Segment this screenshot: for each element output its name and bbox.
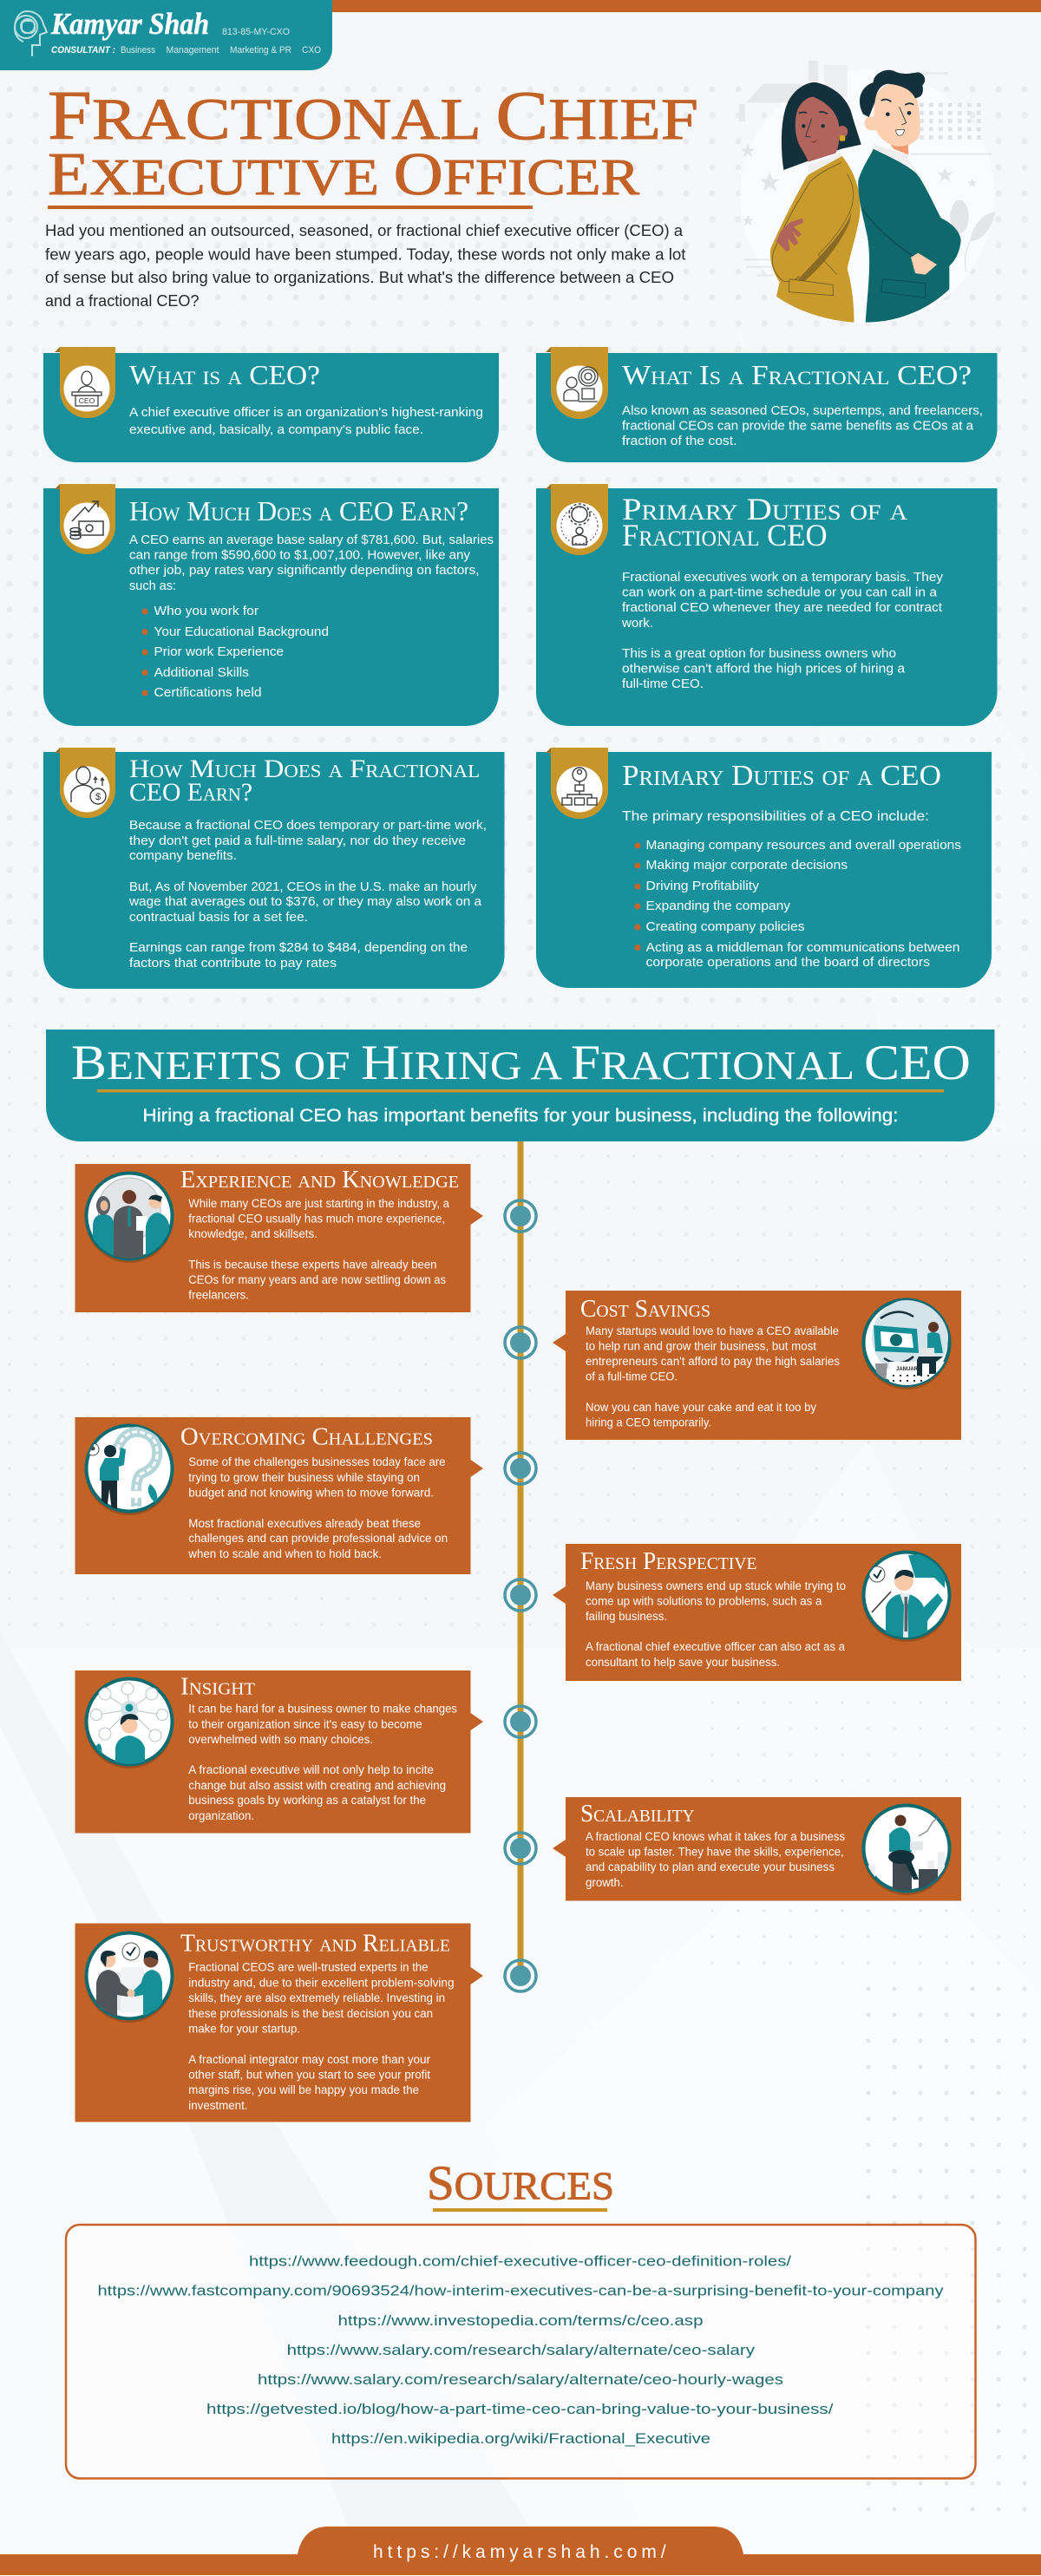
bullet list: Acting as a middleman for communications between <box>645 941 959 955</box>
heading: Cost Savings <box>580 1296 710 1323</box>
body text <box>188 1961 455 2112</box>
body text: contractual basis for a set fee. <box>129 911 308 925</box>
intro paragraph: and a fractional CEO? <box>45 292 200 310</box>
title: EXECUTIVE OFFICER <box>48 141 640 208</box>
tagline: CONSULTANT : <box>51 45 115 56</box>
body text: these professionals is the best decision you can <box>188 2007 433 2020</box>
body text: A fractional integrator may cost more than your <box>188 2053 430 2066</box>
header logo panel <box>0 0 1041 70</box>
timeline spine and nodes <box>505 1141 536 1991</box>
body text: fractional CEO whenever they are needed for contract <box>622 601 942 615</box>
body text <box>586 1579 846 1669</box>
body text: change but also assist with creating and achieving <box>188 1779 446 1792</box>
illustration: two executives back to back <box>739 61 995 324</box>
card: scalability <box>553 1797 961 1901</box>
body text <box>129 406 483 437</box>
body text: when to scale and when to hold back. <box>187 1547 382 1560</box>
intro paragraph: few years ago, people would have been stumped. Today, these words not only make a lot <box>45 246 685 264</box>
tagline: CXO <box>302 45 321 56</box>
heading: Primary Duties of a CEO <box>622 760 941 792</box>
panel: what is a CEO <box>43 347 499 462</box>
brand name: Kamyar Shah <box>50 7 209 41</box>
body text: can range from $590,600 to $1,007,100. However, like any <box>129 548 471 562</box>
body text <box>621 571 944 691</box>
bullet list <box>635 839 961 970</box>
icon: CEO at podium <box>55 347 115 418</box>
icon: head logo <box>15 11 47 56</box>
panel: sources list: https://getvested.io/blog/how-a-part-time-ceo-can-bring-value-to-your-business/ <box>206 2402 834 2417</box>
heading: Experience and Knowledge <box>180 1167 459 1193</box>
body text: of a full-time CEO. <box>586 1370 678 1383</box>
man <box>865 116 879 130</box>
body text: fraction of the cost. <box>622 435 737 448</box>
panel: sources list: https://www.fastcompany.com/90693524/how-interim-executives-can-be-a-surprising-benefit-to-your-company <box>97 2284 944 2299</box>
panel: sources list: https://www.salary.com/research/salary/alternate/ceo-salary <box>287 2343 756 2358</box>
banner: benefits of hiring a fractional CEO <box>46 1030 994 1141</box>
illustration: handshake <box>85 1932 174 2023</box>
body text: wage that averages out to $376, or they may also work on a <box>128 895 482 909</box>
body text <box>128 819 487 971</box>
body text: entrepreneurs can't afford to pay the high salaries <box>586 1355 840 1368</box>
illustration: money cycle and calendar <box>862 1299 951 1389</box>
subtitle: Hiring a fractional CEO has important benefits for your business, including the following: <box>142 1106 899 1126</box>
tagline: Business <box>121 45 155 56</box>
body text: company benefits. <box>129 849 237 863</box>
body text: margins rise, you will be happy you made the <box>188 2083 419 2096</box>
heading: Primary Duties of a <box>622 492 907 526</box>
body text <box>586 1830 845 1889</box>
panel: how much does a fractional CEO earn <box>43 748 505 989</box>
body text: business goals by working as a catalyst for the <box>188 1794 426 1807</box>
bullet list: corporate operations and the board of directors <box>645 956 930 970</box>
body text: consultant to help save your business. <box>586 1656 780 1669</box>
body text: failing business. <box>586 1610 667 1623</box>
body text: While many CEOs are just starting in the industry, a <box>188 1197 449 1210</box>
heading: How Much Does a Fractional <box>129 755 480 783</box>
illustration: money cycle and calendar: JANUARY <box>896 1367 921 1372</box>
body text: Most fractional executives already beat these <box>188 1517 421 1530</box>
illustration: three professionals with globe <box>85 1173 174 1263</box>
panel: primary duties of a fractional CEO <box>536 484 998 726</box>
panel: sources list: https://en.wikipedia.org/wiki/Fractional_Executive <box>331 2431 710 2447</box>
bullet list: Expanding the company <box>645 899 791 913</box>
tagline <box>51 45 321 56</box>
illustration: seated person with chart <box>862 1806 951 1895</box>
body text: budget and not knowing when to move forward. <box>188 1487 434 1500</box>
body text: otherwise can't afford the high prices of hiring a <box>622 663 906 677</box>
body text: Now you can have your cake and eat it too by <box>586 1401 816 1414</box>
body text <box>129 533 494 593</box>
body text: to scale up faster. They have the skills, experience, <box>586 1846 844 1859</box>
intro paragraph <box>45 222 685 310</box>
body text: trying to grow their business while staying on <box>188 1471 420 1484</box>
body text: Because a fractional CEO does temporary or part-time work, <box>129 819 487 833</box>
body text: But, As of November 2021, CEOs in the U.S. make an hourly <box>129 880 477 894</box>
panel: sources list: https://www.feedough.com/chief-executive-officer-ceo-definition-roles/ <box>249 2254 791 2270</box>
panel: primary duties of a CEO <box>536 748 992 988</box>
body text: This is a great option for business owners who <box>622 647 896 661</box>
card: fresh perspective <box>553 1544 961 1681</box>
body text: Fractional executives work on a temporary basis. They <box>622 571 944 585</box>
woman <box>782 82 861 170</box>
intro text: The primary responsibilities of a CEO include: <box>622 809 929 824</box>
heading: Overcoming Challenges <box>180 1424 433 1451</box>
illustration: executive with flag <box>862 1552 951 1642</box>
bullet list: Prior work Experience <box>154 645 284 659</box>
body text: freelancers. <box>188 1289 249 1302</box>
tagline: Marketing & PR <box>230 45 291 56</box>
heading: CEO Earn? <box>129 778 252 807</box>
heading: BENEFITS OF HIRING A FRACTIONAL CEO <box>71 1036 971 1090</box>
body text: executive and, basically, a company's public face. <box>129 423 423 437</box>
body text: overwhelmed with so many choices. <box>188 1733 373 1746</box>
icon: person with dollar coin <box>55 748 115 818</box>
body text: come up with solutions to problems, such as a <box>586 1595 822 1608</box>
bullet list: Managing company resources and overall operations <box>645 839 961 853</box>
body text: hiring a CEO temporarily. <box>586 1416 711 1429</box>
body text: This is because these experts have already been <box>188 1259 437 1272</box>
intro paragraph: of sense but also bring value to organizations. But what's the difference between a CEO <box>45 269 674 286</box>
heading <box>129 755 480 807</box>
body text <box>188 1703 457 1822</box>
body text: such as: <box>129 579 176 593</box>
icon: CEO at podium: CEO <box>79 396 95 405</box>
footer bar with website <box>0 2527 1041 2575</box>
body text: investment. <box>188 2099 248 2112</box>
body text: can work on a part-time schedule or you can call in a <box>622 586 938 600</box>
body text: A chief executive officer is an organization's highest-ranking <box>129 406 483 420</box>
heading: What Is a Fractional CEO? <box>622 359 972 390</box>
heading: What is a CEO? <box>129 359 320 390</box>
intro paragraph: Had you mentioned an outsourced, seasoned, or fractional chief executive officer (CEO) a <box>45 222 684 239</box>
body text: and capability to plan and execute your business <box>586 1860 835 1873</box>
body text <box>622 404 983 448</box>
body text: other staff, but when you start to see your profit <box>188 2069 430 2082</box>
heading: Fractional CEO <box>622 518 828 552</box>
panel: sources list: https://www.salary.com/research/salary/alternate/ceo-hourly-wages <box>258 2372 783 2388</box>
icon: freelancer with laptop <box>546 347 608 419</box>
panel: sources list: https://www.investopedia.com/terms/c/ceo.asp <box>338 2313 703 2329</box>
body text: they don't get paid a full-time salary, nor do they receive <box>129 834 466 848</box>
body text: A fractional CEO knows what it takes for a business <box>586 1830 845 1843</box>
phone number: 813-85-MY-CXO <box>222 27 290 37</box>
heading: How Much Does a CEO Earn? <box>129 495 468 526</box>
body text: A CEO earns an average base salary of $781,600. But, salaries <box>129 533 494 547</box>
bullet list: Driving Profitability <box>645 879 760 893</box>
body text: It can be hard for a business owner to make changes <box>188 1703 457 1716</box>
body text: full-time CEO. <box>622 677 704 691</box>
body text: industry and, due to their excellent problem-solving <box>188 1976 455 1990</box>
tagline: Management <box>167 45 219 56</box>
panel: what is a fractional CEO <box>536 347 998 462</box>
sources heading: SOURCES <box>427 2157 614 2211</box>
bullet list: Creating company policies <box>645 920 805 934</box>
card: experience and knowledge <box>75 1164 483 1312</box>
body text: other job, pay rates vary significantly depending on factors, <box>129 564 479 578</box>
bullet list: Who you work for <box>154 605 259 618</box>
card: trustworthy and reliable <box>75 1924 483 2122</box>
icon: money and growth arrow <box>55 484 115 554</box>
heading <box>622 492 907 552</box>
body text: to help run and grow their business, but most <box>586 1340 816 1353</box>
body text: Also known as seasoned CEOs, supertemps, and freelancers, <box>622 404 983 418</box>
illustration: person thinking with idea network <box>85 1679 174 1769</box>
body text: skills, they are also extremely reliable. Investing in <box>188 1991 445 2004</box>
body text: make for your startup. <box>188 2023 300 2036</box>
card: overcoming challenges <box>75 1417 483 1574</box>
body text: fractional CEO usually has much more experience, <box>188 1213 445 1226</box>
body text: Many startups would love to have a CEO available <box>586 1324 839 1337</box>
body text: work. <box>621 617 653 631</box>
card: insight <box>75 1670 483 1834</box>
body text: factors that contribute to pay rates <box>129 957 337 971</box>
card: cost savings <box>553 1291 961 1440</box>
body text: Earnings can range from $284 to $484, depending on the <box>129 941 468 955</box>
body text: growth. <box>586 1876 624 1889</box>
bullet list: Additional Skills <box>154 666 249 680</box>
body text: Many business owners end up stuck while trying to <box>586 1579 846 1592</box>
body text <box>188 1197 449 1302</box>
panel: how much does a CEO earn <box>43 484 499 726</box>
body text: CEOs for many years and are now settling down as <box>188 1273 446 1286</box>
body text: challenges and can provide professional advice on <box>188 1532 448 1545</box>
panel: sources list <box>66 2225 975 2479</box>
heading: Fresh Perspective <box>580 1548 756 1575</box>
body text: A fractional chief executive officer can also act as a <box>586 1640 845 1653</box>
bullet list: Making major corporate decisions <box>645 859 848 873</box>
title <box>48 78 698 209</box>
body text <box>187 1455 448 1560</box>
body text: A fractional executive will not only help to incite <box>188 1763 434 1776</box>
body text: fractional CEOs can provide the same benefits as CEOs at a <box>622 420 974 434</box>
body text: Some of the challenges businesses today face are <box>188 1455 446 1468</box>
body text: knowledge, and skillsets. <box>188 1227 318 1240</box>
icon: person with dollar coin: $ <box>95 792 101 802</box>
bullet list: Certifications held <box>154 686 262 700</box>
illustration: man drawing question mark maze <box>85 1426 174 1515</box>
heading: Insight <box>180 1674 255 1700</box>
body text: organization. <box>188 1809 254 1822</box>
icon: org chart <box>546 748 608 819</box>
body text: to their organization since it's easy to become <box>188 1717 422 1730</box>
heading: Scalability <box>580 1801 694 1827</box>
bullet list: Your Educational Background <box>154 625 329 639</box>
footer bar with website: https://kamyarshah.com/ <box>373 2542 666 2562</box>
body text: Fractional CEOS are well-trusted experts in the <box>188 1961 429 1974</box>
bullet list <box>142 605 329 700</box>
heading: Trustworthy and Reliable <box>180 1931 450 1957</box>
title: FRACTIONAL CHIEF <box>48 78 698 154</box>
icon: gear and person <box>546 484 608 555</box>
body text <box>586 1324 840 1429</box>
